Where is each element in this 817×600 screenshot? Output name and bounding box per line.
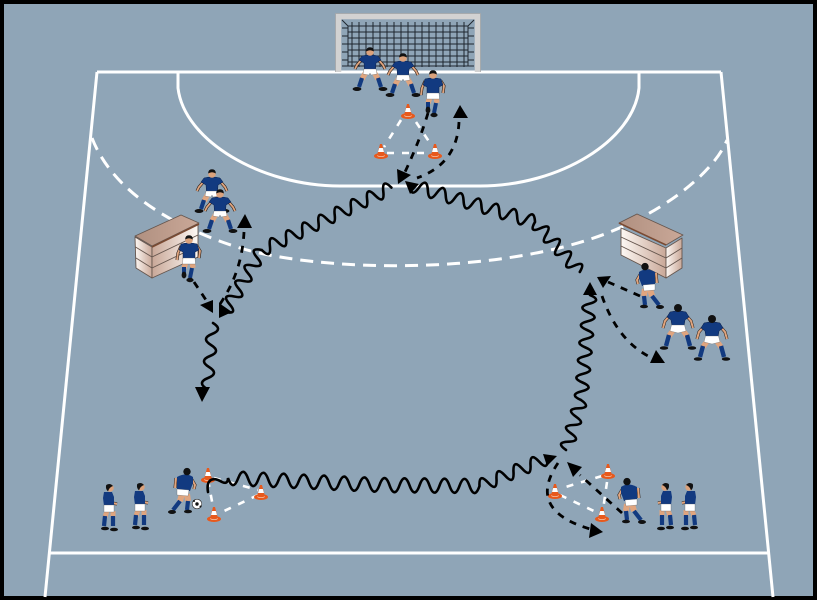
players near goal (353, 47, 444, 117)
vaulting box left (135, 215, 199, 278)
players bottom right (619, 478, 698, 530)
court lines (45, 72, 773, 597)
wavy run paths (202, 183, 596, 493)
cone triangles, white dashed (208, 120, 607, 512)
arrowheads (195, 105, 665, 538)
goal area line (178, 72, 639, 186)
ball (192, 499, 202, 509)
vaulting box right (619, 214, 683, 278)
players bottom left (101, 468, 195, 531)
free-throw dashed line (92, 138, 727, 266)
dashed movement paths (194, 113, 652, 529)
players right group (637, 263, 730, 361)
cones (201, 104, 615, 522)
players left group (177, 169, 237, 282)
goal (336, 14, 480, 72)
